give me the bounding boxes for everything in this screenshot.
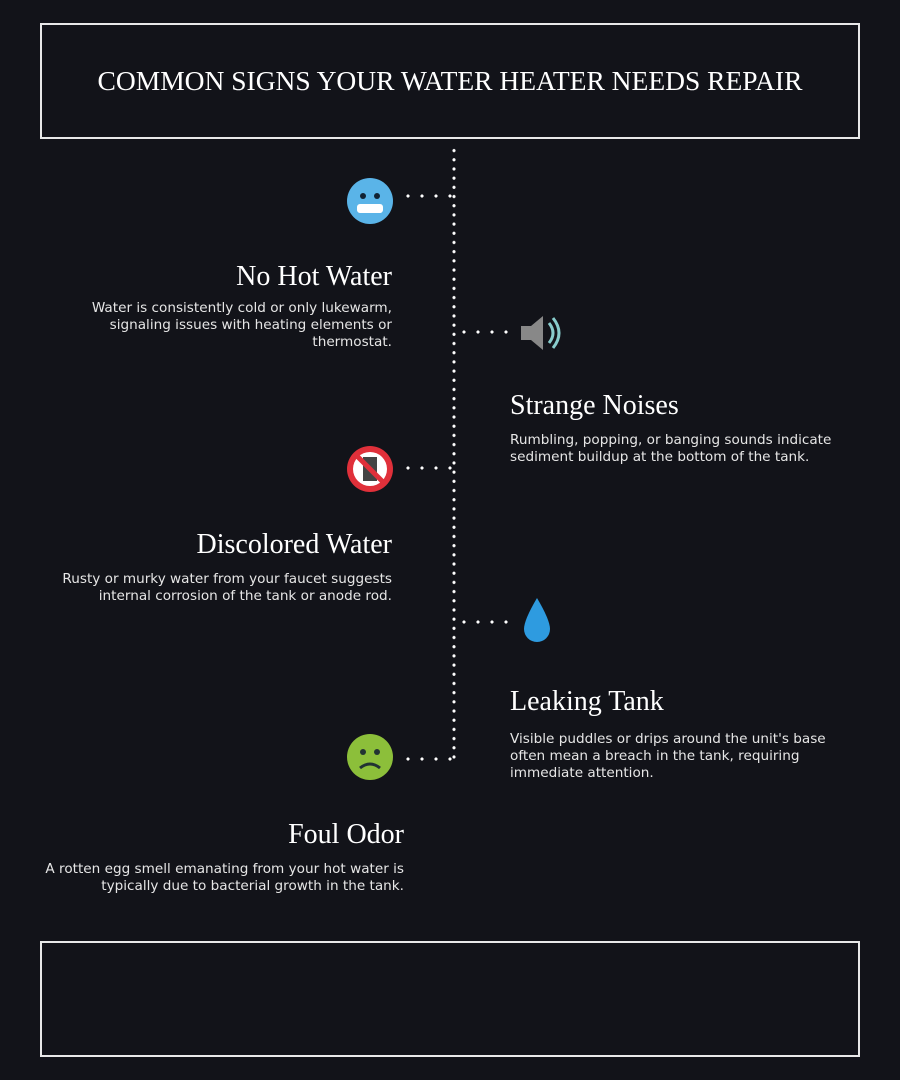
timeline line	[452, 146, 456, 764]
text	[62, 571, 392, 604]
text: often mean a breach in the tank, requiring	[510, 748, 799, 764]
icon: cold face	[347, 178, 393, 224]
text: signaling issues with heating elements or	[110, 317, 392, 333]
text: Water is consistently cold or only lukewarm,	[92, 300, 392, 316]
connector	[457, 620, 513, 624]
heading: Foul Odor	[288, 819, 404, 850]
heading: No Hot Water	[236, 261, 392, 292]
icon: droplet	[524, 598, 550, 642]
text: internal corrosion of the tank or anode rod.	[99, 588, 392, 604]
text	[45, 861, 404, 894]
text	[510, 731, 826, 781]
connector	[401, 757, 457, 761]
heading: Discolored Water	[196, 529, 392, 560]
item: no hot water	[92, 178, 452, 350]
connector	[457, 330, 513, 334]
title box	[40, 23, 860, 139]
icon: nauseated face	[347, 734, 393, 780]
item: leaking tank	[462, 598, 826, 781]
footer box	[40, 941, 860, 1057]
text: A rotten egg smell emanating from your hot water is	[45, 861, 404, 877]
title: COMMON SIGNS YOUR WATER HEATER NEEDS REPAIR	[98, 65, 802, 96]
text: immediate attention.	[510, 765, 654, 781]
text: Rumbling, popping, or banging sounds indicate	[510, 432, 831, 448]
text: thermostat.	[312, 334, 392, 350]
text: typically due to bacterial growth in the tank.	[101, 878, 404, 894]
item: strange noises	[462, 316, 831, 465]
heading: Strange Noises	[510, 390, 679, 421]
text: sediment buildup at the bottom of the tank.	[510, 449, 809, 465]
text: Visible puddles or drips around the unit's base	[510, 731, 826, 747]
text: Rusty or murky water from your faucet suggests	[62, 571, 392, 587]
text	[92, 300, 392, 350]
connector	[401, 194, 457, 198]
connector	[401, 466, 457, 470]
item: discolored water	[62, 446, 452, 604]
heading: Leaking Tank	[510, 686, 664, 717]
item: foul odor	[45, 734, 452, 894]
text	[510, 432, 831, 465]
icon: speaker	[521, 316, 560, 350]
icon: no entry	[347, 446, 393, 492]
